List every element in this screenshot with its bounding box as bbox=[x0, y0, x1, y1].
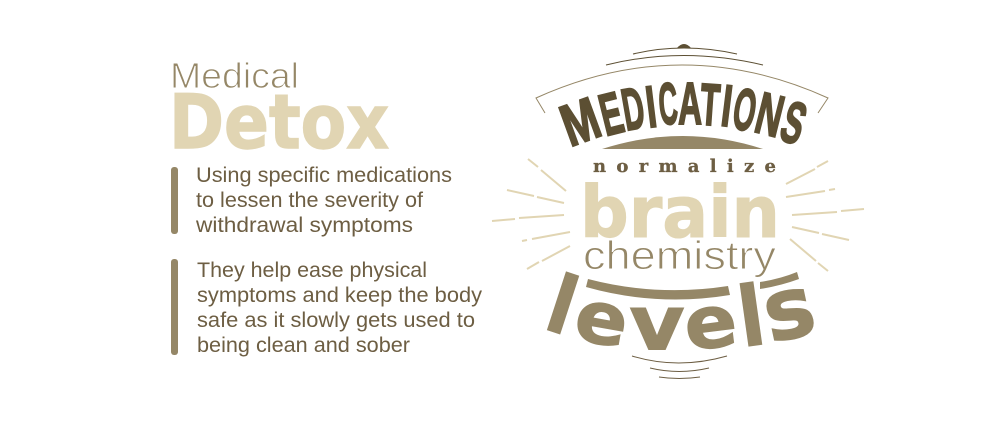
title: Medical Detox bbox=[169, 55, 389, 166]
word: MEDICATIONS: A bbox=[678, 72, 702, 138]
word: MEDICATIONS: O bbox=[728, 75, 762, 144]
word: MEDICATIONS: E bbox=[593, 80, 630, 149]
rays: left bbox=[492, 159, 570, 269]
word: MEDICATIONS: S bbox=[773, 89, 814, 158]
rays: right bbox=[786, 161, 864, 271]
word: brain: brain bbox=[580, 171, 780, 254]
word: levels: v bbox=[629, 279, 685, 367]
word: levels: e bbox=[569, 272, 635, 365]
word: MEDICATIONS: N bbox=[749, 81, 790, 150]
curved bands above levels bbox=[586, 272, 799, 300]
point text: being clean and sober bbox=[197, 334, 410, 357]
point text: safe as it slowly gets used to bbox=[197, 309, 475, 332]
word: chemistry: chemistry bbox=[583, 234, 776, 278]
heading: Detox: Detox bbox=[169, 78, 389, 166]
point text: withdrawal symptoms bbox=[195, 214, 413, 237]
point text: Using specific medications bbox=[196, 164, 452, 187]
heading: Medical: Medical bbox=[170, 55, 299, 96]
point text: They help ease physical bbox=[197, 259, 427, 282]
word: MEDICATIONS: T bbox=[698, 72, 722, 139]
word: MEDICATIONS: I bbox=[642, 74, 660, 141]
word: levels: l bbox=[732, 267, 771, 367]
word: MEDICATIONS: C bbox=[656, 70, 680, 138]
badge: bottom arcs bbox=[632, 356, 727, 378]
word: levels: e bbox=[679, 277, 742, 368]
word: MEDICATIONS: I bbox=[718, 73, 736, 140]
text block: first point bbox=[171, 164, 452, 237]
point text: symptoms and keep the body bbox=[197, 284, 483, 307]
accent bar bbox=[171, 259, 178, 355]
accent bar bbox=[171, 167, 178, 234]
word: levels: l bbox=[535, 259, 588, 354]
arch under MEDICATIONS bbox=[602, 136, 763, 149]
word: levels: s bbox=[754, 256, 824, 363]
word: MEDICATIONS bbox=[552, 70, 814, 159]
word: normalize: normalize bbox=[593, 156, 776, 177]
text block: second point bbox=[171, 259, 483, 357]
point text: to lessen the severity of bbox=[196, 189, 423, 212]
badge: top arcs bbox=[536, 44, 828, 113]
word: MEDICATIONS: M bbox=[552, 84, 609, 159]
word: levels bbox=[535, 256, 824, 368]
word: MEDICATIONS: D bbox=[617, 75, 649, 143]
